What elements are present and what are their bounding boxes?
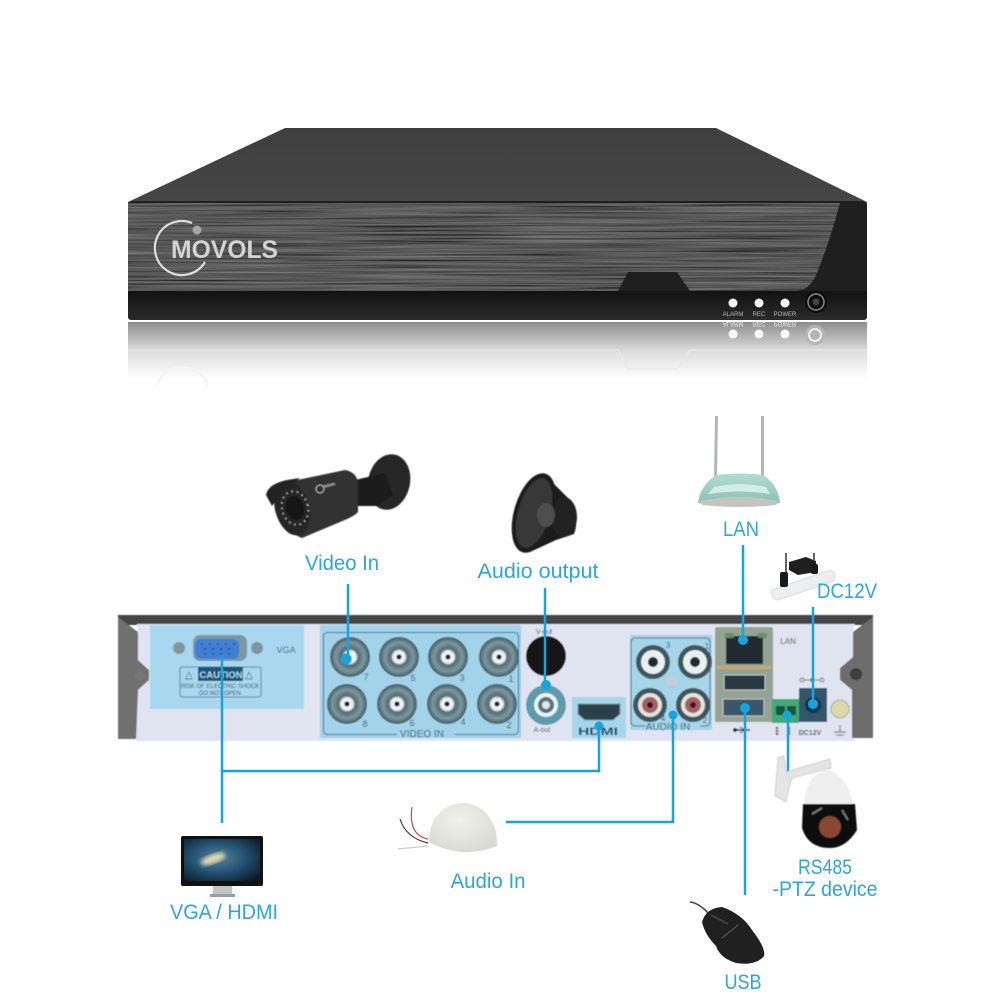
VIDEO IN connectors: 3 bbox=[459, 673, 465, 683]
panel face bbox=[136, 624, 856, 741]
MOVOLS logo: MOVOLS bbox=[171, 236, 278, 264]
VIDEO IN connectors: 7 bbox=[363, 672, 369, 682]
AUDIO IN connectors: 3 bbox=[666, 641, 671, 650]
ground screw bbox=[831, 700, 849, 735]
VIDEO IN connectors: 6 bbox=[409, 718, 415, 728]
V-out and A-out bbox=[526, 629, 566, 734]
VGA port region: VGA bbox=[276, 645, 296, 655]
HDMI port bbox=[572, 697, 626, 738]
DC12V power jack bbox=[799, 678, 827, 737]
AUDIO IN connectors bbox=[630, 635, 712, 733]
RS485 terminal bbox=[772, 699, 799, 736]
connector lines bbox=[222, 545, 813, 895]
VIDEO IN connectors bbox=[320, 625, 521, 740]
status indicators: POWER bbox=[774, 312, 797, 318]
icon: mouse bbox=[690, 902, 764, 964]
DC12V power jack: DC12V bbox=[799, 730, 822, 737]
AUDIO IN connectors: AUDIO IN bbox=[646, 722, 690, 733]
VGA port region: RISK OF ELECTRIC SHOCK bbox=[181, 684, 259, 690]
DVR reflection bbox=[128, 320, 867, 386]
VGA port region bbox=[150, 625, 304, 709]
label: LAN: LAN bbox=[723, 518, 759, 541]
label: USB: USB bbox=[724, 971, 762, 994]
icon: PTZ camera bbox=[775, 756, 857, 848]
right bracket bbox=[840, 617, 873, 738]
DVR top cover bbox=[128, 128, 867, 215]
VGA port region: DO NOT OPEN bbox=[199, 691, 241, 697]
VGA port region: △ bbox=[245, 670, 253, 681]
icon: dome microphone bbox=[398, 803, 497, 852]
MOVOLS logo bbox=[155, 221, 278, 275]
DVR front body bbox=[128, 201, 867, 320]
DVR reflection: ALARM bbox=[723, 320, 743, 326]
status indicators: ALARM bbox=[723, 312, 743, 318]
label: Video In: Video In bbox=[305, 552, 379, 575]
icon: speaker bbox=[503, 468, 577, 558]
V-out and A-out: V-out bbox=[536, 629, 552, 636]
VGA port region: CAUTION bbox=[199, 670, 243, 681]
DVR reflection: REC bbox=[753, 320, 766, 326]
LAN and USB ports bbox=[715, 627, 796, 733]
label: Audio output: Audio output bbox=[478, 560, 599, 583]
VGA port region: △ bbox=[185, 670, 193, 681]
VIDEO IN connectors: 4 bbox=[460, 717, 466, 727]
DVR reflection: POWER bbox=[774, 320, 797, 326]
icon: bullet camera bbox=[266, 450, 415, 539]
HDMI port: HDMI bbox=[578, 726, 618, 738]
icon: router bbox=[698, 416, 780, 507]
VIDEO IN connectors: 8 bbox=[362, 719, 368, 729]
status indicators bbox=[723, 291, 827, 318]
lower front strip bbox=[128, 291, 867, 320]
rear panel bbox=[118, 615, 873, 741]
rear panel top edge bbox=[118, 615, 873, 625]
icon: monitor bbox=[181, 836, 263, 897]
AUDIO IN connectors: 1 bbox=[705, 642, 710, 651]
left bracket bbox=[118, 617, 149, 739]
VIDEO IN connectors: VIDEO IN bbox=[400, 729, 444, 740]
DVR front view bbox=[128, 128, 867, 386]
brushed front panel bbox=[128, 203, 840, 291]
VIDEO IN connectors: 2 bbox=[506, 720, 512, 730]
connection points bbox=[340, 635, 818, 730]
VIDEO IN connectors: 1 bbox=[508, 674, 514, 684]
V-out and A-out: A-out bbox=[534, 727, 550, 734]
AUDIO IN connectors: 4 bbox=[661, 714, 666, 723]
label: DC12V: DC12V bbox=[817, 580, 877, 603]
VIDEO IN connectors: 5 bbox=[410, 673, 416, 683]
label: -PTZ device: -PTZ device bbox=[772, 878, 878, 901]
AUDIO IN connectors: 2 bbox=[703, 716, 708, 725]
label: RS485: RS485 bbox=[798, 856, 852, 879]
LAN and USB ports: LAN bbox=[780, 637, 796, 646]
label: VGA / HDMI: VGA / HDMI bbox=[170, 901, 278, 924]
icon: power strip and adapter bbox=[772, 553, 835, 600]
status indicators: REC bbox=[753, 312, 766, 318]
label: Audio In: Audio In bbox=[450, 870, 526, 893]
